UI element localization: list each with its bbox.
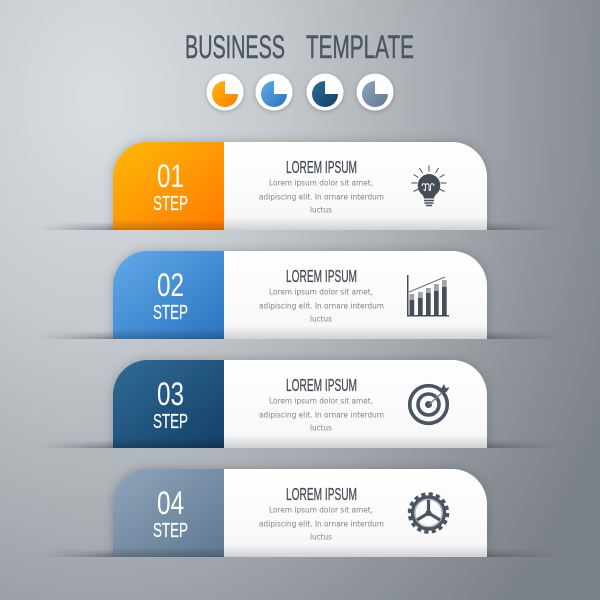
text block: adipiscing elit. In ornare interdum (259, 302, 384, 310)
text block: luctus (310, 206, 332, 214)
text block: Lorem ipsum dolor sit amet, (269, 506, 373, 514)
icon: slate pie (356, 74, 394, 110)
step label: STEP (153, 411, 188, 433)
text block: adipiscing elit. In ornare interdum (259, 410, 384, 420)
step label: STEP (153, 193, 188, 215)
title: BUSINESS (185, 29, 285, 65)
step number: 02 (157, 267, 184, 303)
text block (259, 506, 384, 542)
icon: gear (410, 494, 448, 532)
text block: adipiscing elit. In ornare interdum (259, 192, 384, 202)
icon: blue pie (256, 74, 292, 110)
title: TEMPLATE (306, 29, 414, 65)
step number: 01 (157, 158, 184, 194)
panel: step 01 (40, 142, 560, 240)
heading: LOREM IPSUM (286, 266, 357, 286)
step number: 04 (157, 485, 184, 521)
text block (259, 396, 384, 432)
panel: step 04 (52, 466, 542, 557)
text block: Lorem ipsum dolor sit amet, (269, 288, 373, 296)
icon: bar chart (407, 275, 449, 316)
text block: Lorem ipsum dolor sit amet, (269, 396, 373, 406)
text block: Lorem ipsum dolor sit amet, (269, 178, 373, 188)
icon: orange pie (206, 74, 244, 110)
step label: STEP (153, 302, 188, 324)
panel: step 03 (50, 356, 544, 448)
panel: step 02 (40, 251, 560, 349)
heading: LOREM IPSUM (286, 157, 357, 177)
text block: luctus (310, 424, 332, 432)
heading: LOREM IPSUM (286, 484, 357, 504)
text block (259, 178, 384, 214)
icon: navy pie (306, 74, 344, 110)
text block: luctus (310, 314, 332, 324)
heading: LOREM IPSUM (286, 375, 357, 395)
text block: adipiscing elit. In ornare interdum (259, 520, 384, 528)
step number: 03 (157, 376, 184, 412)
icon: target (410, 384, 450, 423)
icon: light bulb (412, 166, 446, 206)
text block: luctus (310, 532, 332, 542)
step label: STEP (153, 520, 188, 542)
text block (259, 288, 384, 324)
